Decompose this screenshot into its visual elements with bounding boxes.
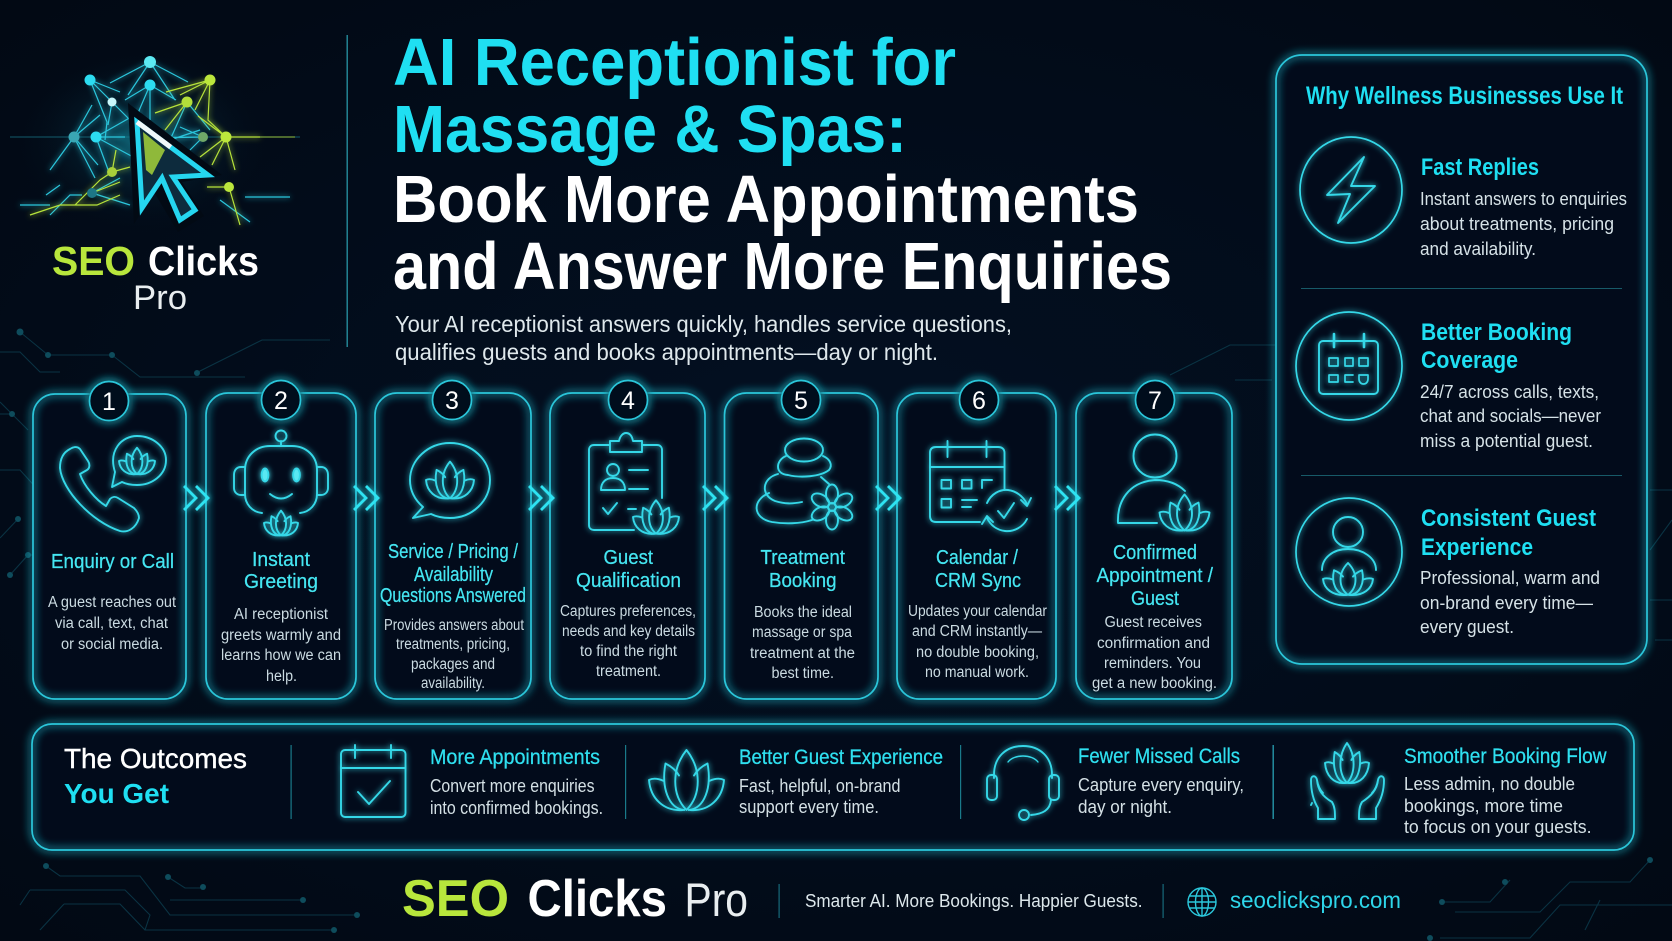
benefit: fast replies: Fast Replies xyxy=(1421,154,1539,181)
description: step 1: via call, text, chat xyxy=(55,615,169,632)
title: Book More Appointments xyxy=(393,162,1139,237)
step number 2 xyxy=(262,380,300,420)
step number 6 xyxy=(960,380,998,420)
heading: Guest Qualification xyxy=(576,547,681,592)
logo wordmark: Clicks xyxy=(148,238,259,284)
icon: neural network cursor xyxy=(10,45,300,235)
benefit: fast replies xyxy=(1420,154,1627,259)
icon: spa stones and flower xyxy=(757,438,855,530)
icon: booking calendar xyxy=(1296,312,1402,420)
description: step 7: reminders. You xyxy=(1104,655,1201,672)
icon: lightning bolt xyxy=(1300,137,1402,243)
title xyxy=(393,25,1172,304)
description: step 5: treatment at the xyxy=(750,645,855,662)
benefit: better booking coverage: Coverage xyxy=(1421,347,1518,374)
heading: Service / Pricing / Availability Questions Answered: Questions Answered xyxy=(380,585,526,607)
step number 1 xyxy=(90,382,128,420)
description: step 5: massage or spa xyxy=(752,624,852,641)
benefit: fast replies: Instant answers to enquiries xyxy=(1420,189,1627,209)
step number 6: 6 xyxy=(972,387,986,415)
panel: step 2 instant greeting xyxy=(206,380,356,699)
benefit: consistent guest experience: Experience xyxy=(1421,534,1533,561)
panel: step 3 questions answered xyxy=(375,380,531,699)
description: step 2 xyxy=(221,606,341,685)
heading: Treatment Booking: Treatment xyxy=(760,547,845,569)
heading: Calendar / CRM Sync: CRM Sync xyxy=(935,570,1021,592)
panel: step 7 confirmed appointment xyxy=(1076,380,1232,699)
step number 3 xyxy=(432,380,472,420)
heading: Calendar / CRM Sync xyxy=(935,547,1021,592)
footer xyxy=(402,870,1401,928)
description: step 7: confirmation and xyxy=(1097,635,1210,652)
step number 3: 3 xyxy=(445,387,459,415)
step number 5: 5 xyxy=(794,387,808,415)
heading: Guest Qualification: Guest xyxy=(604,547,653,569)
step number 1: 1 xyxy=(102,388,116,416)
benefit: better booking coverage xyxy=(1420,319,1601,451)
heading: Treatment Booking: Booking xyxy=(769,570,836,592)
header divider xyxy=(346,35,348,347)
step number 5 xyxy=(782,380,820,420)
footer logo: Clicks xyxy=(528,870,667,928)
heading: Service / Pricing / Availability Questions Answered: Service / Pricing / xyxy=(388,541,518,563)
subtitle xyxy=(395,311,1012,365)
icon: phone and lotus chat xyxy=(60,436,166,531)
step number 4 xyxy=(608,380,648,420)
description: step 2: learns how we can xyxy=(221,647,341,664)
footer logo: SEO xyxy=(402,870,509,928)
description: step 5: best time. xyxy=(772,665,834,682)
outcome: more appointments: More Appointments xyxy=(430,746,600,769)
panel: step 6 calendar / CRM sync xyxy=(897,380,1056,699)
benefit: better booking coverage: 24/7 across calls, texts, xyxy=(1420,382,1599,402)
step number 2: 2 xyxy=(274,387,288,415)
website address: seoclickspro.com xyxy=(1230,887,1401,913)
heading: Instant Greeting: Greeting xyxy=(244,571,318,593)
footer logo: Pro xyxy=(684,873,748,926)
description: step 4: treatment. xyxy=(596,663,661,680)
icon: lotus chat bubble xyxy=(410,443,490,518)
benefit: fast replies: and availability. xyxy=(1420,239,1536,259)
description: step 6: no double booking, xyxy=(916,644,1039,661)
outcome: better guest experience xyxy=(739,746,943,817)
title: Massage & Spas: xyxy=(393,92,907,167)
step number 7 xyxy=(1136,380,1174,420)
benefit: better booking coverage: Better Booking xyxy=(1421,319,1572,346)
outcome: fewer missed calls: day or night. xyxy=(1078,797,1172,817)
description: step 3: packages and xyxy=(411,656,495,673)
benefit: consistent guest experience: Professional, warm and xyxy=(1420,568,1600,588)
description: step 2: greets warmly and xyxy=(221,627,341,644)
heading: Enquiry or Call: Enquiry or Call xyxy=(51,551,174,573)
step number 7: 7 xyxy=(1148,387,1162,415)
panel: why wellness businesses use it xyxy=(1276,55,1647,664)
heading: Instant Greeting xyxy=(244,549,318,593)
heading: Calendar / CRM Sync: Calendar / xyxy=(936,547,1018,569)
step number 4: 4 xyxy=(621,387,635,415)
outcome: fewer missed calls: Fewer Missed Calls xyxy=(1078,745,1240,768)
logo wordmark: SEO xyxy=(52,238,135,284)
outcome: more appointments xyxy=(430,746,603,818)
description: step 7 xyxy=(1092,614,1217,692)
outcome: smoother booking flow: Smoother Booking Flow xyxy=(1404,745,1607,768)
icon: guest with lotus xyxy=(1296,498,1402,606)
outcome: better guest experience: support every time. xyxy=(739,797,879,817)
benefit: fast replies: about treatments, pricing xyxy=(1420,214,1614,234)
logo: SEO Clicks Pro xyxy=(10,45,300,317)
outcome: better guest experience: Better Guest Experience xyxy=(739,746,943,769)
outcome: smoother booking flow: Less admin, no double xyxy=(1404,774,1575,794)
heading: the outcomes you get: You Get xyxy=(64,778,169,809)
panel: step 1 enquiry or call xyxy=(33,382,186,699)
logo wordmark xyxy=(52,238,259,317)
description: step 4 xyxy=(560,603,696,680)
description: step 4: to find the right xyxy=(580,643,678,660)
heading: the outcomes you get: The Outcomes xyxy=(64,743,247,774)
outcome: fewer missed calls xyxy=(1078,745,1244,817)
title: AI Receptionist for xyxy=(393,25,956,100)
description: step 6 xyxy=(908,603,1047,681)
description: step 3: availability. xyxy=(421,675,485,692)
heading: Confirmed Appointment / Guest: Appointment / xyxy=(1096,565,1213,587)
outcome: smoother booking flow: to focus on your guests. xyxy=(1404,817,1592,837)
icon: robot receptionist xyxy=(234,430,328,535)
description: step 4: needs and key details xyxy=(562,623,695,640)
benefit: better booking coverage: miss a potential guest. xyxy=(1420,431,1593,451)
heading: Guest Qualification: Qualification xyxy=(576,570,681,592)
icon: clipboard and lotus xyxy=(589,433,679,534)
benefit: consistent guest experience: Consistent Guest xyxy=(1421,505,1596,532)
footer logo xyxy=(402,870,748,928)
panel: step 4 guest qualification xyxy=(550,380,705,699)
description: step 1 xyxy=(48,594,177,653)
outcome: more appointments: Convert more enquiries xyxy=(430,776,594,796)
heading: Confirmed Appointment / Guest: Guest xyxy=(1131,588,1179,610)
panel: the outcomes you get xyxy=(32,724,1634,850)
icon: calendar check xyxy=(341,745,406,817)
description: step 5 xyxy=(750,604,855,682)
outcome: better guest experience: Fast, helpful, on-brand xyxy=(739,776,900,796)
description: step 2: AI receptionist xyxy=(234,606,329,623)
icon: headset xyxy=(987,746,1059,820)
heading: Treatment Booking xyxy=(760,547,845,592)
heading: Service / Pricing / Availability Questions Answered xyxy=(380,541,526,607)
panel: step 5 treatment booking xyxy=(724,380,878,699)
icon: lotus xyxy=(649,750,724,810)
outcome: smoother booking flow xyxy=(1404,745,1607,837)
outcome: more appointments: into confirmed bookings. xyxy=(430,798,603,818)
description: step 2: help. xyxy=(266,668,297,685)
icon: globe xyxy=(1188,888,1216,916)
benefit: better booking coverage: chat and socials—never xyxy=(1420,406,1601,426)
description: step 5: Books the ideal xyxy=(754,604,852,621)
tagline: Smarter AI. More Bookings. Happier Guests. xyxy=(805,891,1142,911)
description: step 1: A guest reaches out xyxy=(48,594,177,611)
icon: hands holding lotus xyxy=(1311,743,1384,819)
subtitle: qualifies guests and books appointments—day or night. xyxy=(395,339,938,365)
outcome: smoother booking flow: bookings, more time xyxy=(1404,796,1563,816)
outcome: fewer missed calls: Capture every enquiry, xyxy=(1078,775,1244,795)
arrows between steps xyxy=(184,486,1079,510)
description: step 1: or social media. xyxy=(61,636,163,653)
icon: guest with lotus xyxy=(1118,434,1210,531)
description: step 6: Updates your calendar xyxy=(908,603,1047,620)
description: step 6: and CRM instantly— xyxy=(912,623,1042,640)
description: step 6: no manual work. xyxy=(925,664,1029,681)
heading: Confirmed Appointment / Guest xyxy=(1096,542,1213,610)
heading: Instant Greeting: Instant xyxy=(252,549,310,571)
description: step 7: Guest receives xyxy=(1104,614,1202,631)
description: step 3: treatments, pricing, xyxy=(396,636,510,653)
heading: the outcomes you get xyxy=(64,743,247,809)
benefit: consistent guest experience: on-brand every time— xyxy=(1420,593,1593,613)
benefit: consistent guest experience: every guest. xyxy=(1420,617,1514,637)
description: step 4: Captures preferences, xyxy=(560,603,696,620)
description: step 3: Provides answers about xyxy=(384,617,525,634)
description: step 3 xyxy=(384,617,525,692)
subtitle: Your AI receptionist answers quickly, handles service questions, xyxy=(395,311,1012,337)
benefit: consistent guest experience xyxy=(1420,505,1600,637)
description: step 7: get a new booking. xyxy=(1092,675,1217,692)
title: and Answer More Enquiries xyxy=(393,229,1172,304)
heading: Confirmed Appointment / Guest: Confirmed xyxy=(1113,542,1197,564)
logo wordmark: Pro xyxy=(133,279,187,317)
heading: Service / Pricing / Availability Questions Answered: Availability xyxy=(414,564,493,586)
icon: calendar sync xyxy=(930,441,1031,531)
